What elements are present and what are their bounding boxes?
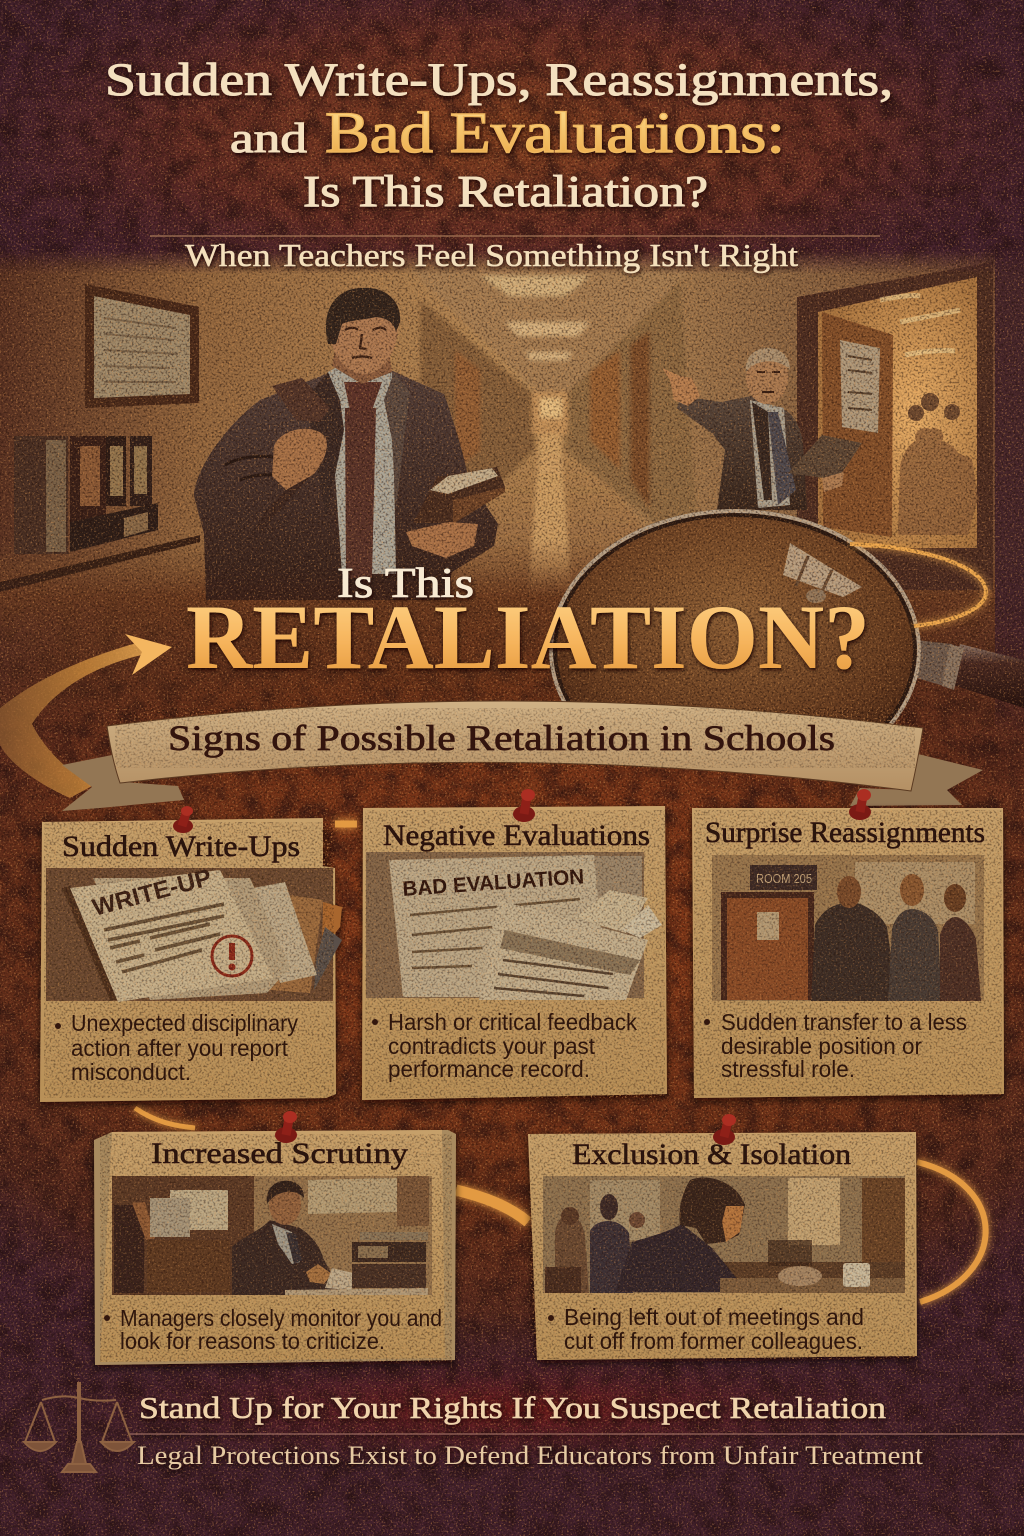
scrutiny text: look for reasons to criticize. (120, 1328, 385, 1354)
title block: Sudden Write-Ups, Reassignments, (105, 54, 893, 106)
footer message (130, 1390, 1024, 1470)
panel: increased scrutiny (94, 1130, 456, 1365)
reassignments text: desirable position or (721, 1033, 922, 1059)
illustration: school hallway scene (0, 252, 1024, 724)
exclusion heading: Exclusion & Isolation (572, 1138, 851, 1171)
reassignments illustration: ROOM 205 (756, 871, 812, 886)
reassignments text (704, 1009, 967, 1082)
headline: is this retaliation: Is This (337, 561, 474, 607)
evaluations illustration: BAD EVALUATION (402, 865, 585, 901)
evaluations text: performance record. (388, 1056, 590, 1082)
icon: pin evaluations (513, 789, 535, 822)
write-ups illustration (46, 864, 342, 1002)
title block (105, 54, 893, 216)
icon: pin reassignments (849, 789, 871, 820)
pointing administrator (662, 348, 862, 510)
write-ups illustration: WRITE-UP (90, 864, 214, 922)
title divider (150, 235, 880, 237)
scrutiny text: Managers closely monitor you and (120, 1305, 442, 1331)
ribbon banner: signs of possible retaliation (62, 701, 983, 811)
swoosh behind lower cards (135, 824, 986, 1302)
swoosh: right of lens (850, 544, 986, 626)
subtitle: When Teachers Feel Something Isn't Right (185, 237, 798, 273)
magnifying glass (549, 509, 1024, 724)
icon: pin exclusion (713, 1114, 736, 1145)
evaluations illustration (366, 852, 662, 1000)
panel: sudden write-ups (40, 818, 342, 1102)
binders on shelf (0, 436, 200, 592)
exclusion illustration (543, 1176, 905, 1293)
reassignments text: stressful role. (721, 1056, 855, 1082)
panel: exclusion and isolation (528, 1132, 917, 1360)
lens window reflection (783, 543, 862, 603)
write-ups text: action after you report (71, 1035, 289, 1061)
wall notice board (85, 284, 199, 408)
write-ups heading: Sudden Write-Ups (62, 830, 300, 863)
headline: is this retaliation: RETALIATION? (186, 586, 870, 688)
exclusion text (548, 1304, 864, 1354)
panel: negative evaluations (362, 806, 667, 1100)
teacher with books (194, 288, 505, 600)
title block: Bad Evaluations: (325, 100, 785, 165)
reassignments text: Sudden transfer to a less (721, 1009, 967, 1035)
ribbon banner: signs of possible retaliation: Signs of Possible Retaliation in Schools (168, 718, 835, 758)
panel: surprise reassignments (692, 808, 1004, 1098)
scrutiny heading: Increased Scrutiny (151, 1137, 408, 1170)
title block: and (230, 116, 307, 162)
evaluations text (372, 1009, 637, 1082)
write-ups text: misconduct. (71, 1059, 191, 1085)
evaluations heading: Negative Evaluations (383, 819, 650, 852)
reassignments illustration (712, 855, 984, 1001)
exclusion text: Being left out of meetings and (564, 1304, 864, 1330)
icon: pin scrutiny (275, 1111, 297, 1143)
title block: Is This Retaliation? (303, 167, 708, 216)
office doorway (797, 255, 1024, 660)
write-ups text (55, 1010, 298, 1085)
hallway background (0, 250, 1024, 730)
footer message: Stand Up for Your Rights If You Suspect Retaliation (139, 1390, 887, 1425)
scrutiny illustration (112, 1176, 432, 1295)
evaluations text: contradicts your past (388, 1033, 596, 1059)
footer message: Legal Protections Exist to Defend Educators from Unfair Treatment (137, 1441, 924, 1470)
icon: pin write-ups (173, 806, 193, 833)
icon: scales of justice (24, 1382, 134, 1472)
scrutiny text (104, 1305, 442, 1354)
reassignments heading: Surprise Reassignments (705, 816, 985, 849)
exclusion text: cut off from former colleagues. (564, 1328, 863, 1354)
arrow: sweeping to headline (0, 634, 172, 798)
evaluations text: Harsh or critical feedback (388, 1009, 637, 1035)
write-ups text: Unexpected disciplinary (71, 1010, 298, 1036)
